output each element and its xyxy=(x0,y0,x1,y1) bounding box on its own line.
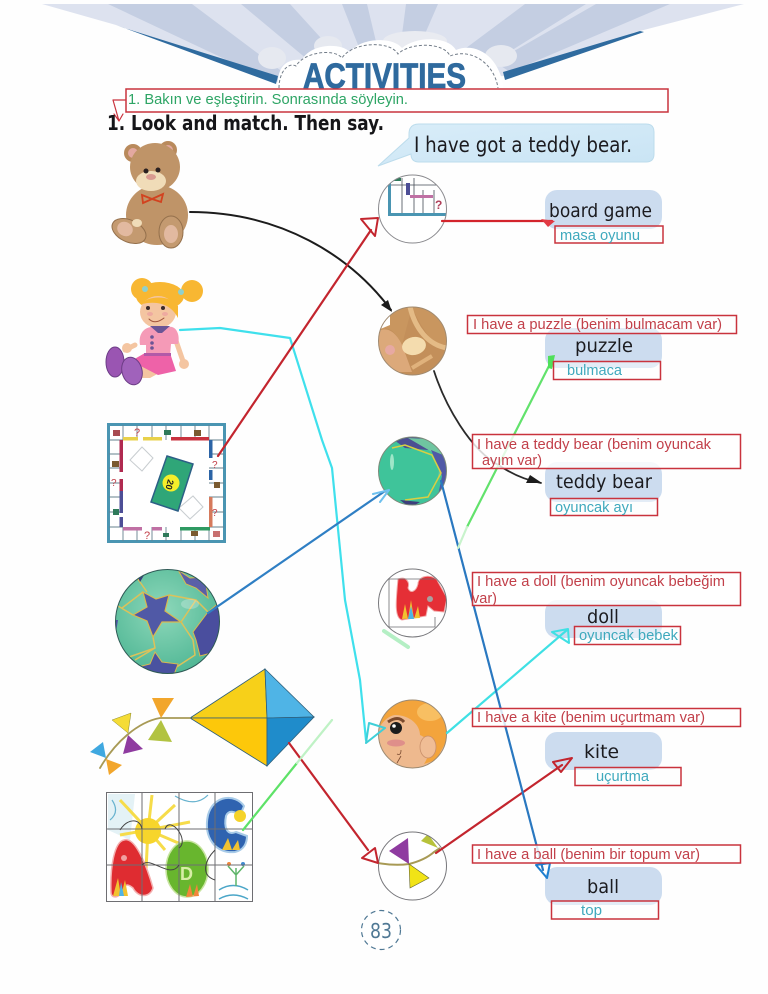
picture: board game: 20 xyxy=(163,478,176,491)
translation callout: instruction xyxy=(113,89,668,121)
translation: top xyxy=(552,901,658,919)
translation: top: top xyxy=(581,902,602,919)
word label: puzzle: puzzle xyxy=(575,335,633,357)
circle: puzzle detail xyxy=(378,568,448,638)
heading: look and match: 1. Look and match. Then say. xyxy=(107,111,384,135)
speech bubble xyxy=(378,124,654,166)
translation: uçurtma xyxy=(575,768,681,786)
arrow: red kite to circle xyxy=(289,743,378,863)
word label: board game xyxy=(545,190,662,229)
word label: ball xyxy=(545,867,662,905)
title: ACTIVITIES: ACTIVITIES xyxy=(303,57,466,96)
picture: board game xyxy=(108,424,224,542)
picture: kite xyxy=(90,669,314,775)
translation: masa oyunu: masa oyunu xyxy=(560,227,640,244)
arrow: red circle to kite label xyxy=(436,758,572,853)
picture: ball xyxy=(115,569,220,674)
word label: teddy bear: teddy bear xyxy=(556,471,652,493)
arrow: green puzzle to circle xyxy=(243,631,408,830)
translation callout: instruction: 1. Bakın ve eşleştirin. Sonrasında söyleyin. xyxy=(128,91,408,108)
circle: doll face detail xyxy=(378,700,447,768)
arrow: black teddy to circle xyxy=(190,212,392,312)
picture: teddy bear xyxy=(108,141,188,249)
arrow: red board game to circle xyxy=(218,218,378,456)
circle: teddy bear detail xyxy=(378,307,448,375)
page number 83: 83 xyxy=(370,919,392,943)
translation: I have a kite: I have a kite (benim uçurtmam var) xyxy=(477,709,705,726)
word label: doll: doll xyxy=(587,606,619,628)
translation: uçurtma: uçurtma xyxy=(596,768,650,785)
arrow: black circle to teddy bear label xyxy=(434,371,542,483)
picture: board game: ? xyxy=(134,427,140,439)
arrow: green circle to puzzle label xyxy=(458,355,555,548)
circle: board game detail xyxy=(378,175,448,245)
translation: oyuncak ayı: oyuncak ayı xyxy=(555,499,633,516)
translation: bulmaca: bulmaca xyxy=(567,362,623,379)
word label: ball: ball xyxy=(587,876,619,898)
word label: teddy bear xyxy=(545,462,662,502)
word label: kite xyxy=(545,732,662,770)
header cloud xyxy=(258,31,517,90)
arrow: blue circle to ball label xyxy=(441,481,550,878)
picture: puzzle xyxy=(106,792,253,902)
arrow: cyan doll to face xyxy=(180,328,385,743)
picture: board game: ? xyxy=(212,460,218,471)
circle: ball detail xyxy=(378,437,450,508)
picture: board game: ? xyxy=(111,478,117,489)
word label: puzzle xyxy=(545,328,662,368)
arrow: blue ball to circle xyxy=(208,490,389,613)
word label: kite: kite xyxy=(584,741,619,763)
picture: puzzle: D xyxy=(180,864,193,884)
translation: I have a doll: var) xyxy=(472,590,497,607)
page number 83 xyxy=(362,910,400,950)
translation: I have a teddy bear xyxy=(472,434,740,469)
word label: doll xyxy=(545,600,662,638)
circle: board game detail: ? xyxy=(435,198,442,212)
picture: board game: ? xyxy=(212,508,218,519)
translation: I have a teddy bear: I have a teddy bear (benim oyuncak xyxy=(477,436,711,453)
translation: I have a doll: I have a doll (benim oyuncak bebeğim xyxy=(477,573,725,590)
translation: I have a ball: I have a ball (benim bir topum var) xyxy=(477,846,700,863)
arrow: cyan face to doll label xyxy=(447,629,569,733)
picture: board game: ? xyxy=(144,530,150,542)
translation: I have a puzzle: I have a puzzle (benim bulmacam var) xyxy=(473,316,722,333)
speech bubble: I have got a teddy bear. xyxy=(414,133,632,157)
translation: bulmaca xyxy=(554,362,660,380)
picture: doll xyxy=(106,278,203,387)
header sunburst banner xyxy=(42,4,744,85)
word label: board game: board game xyxy=(549,200,652,222)
translation: I have a teddy bear: ayım var) xyxy=(482,452,542,469)
translation: I have a doll xyxy=(472,572,740,607)
circle: kite tail detail xyxy=(378,832,448,900)
arrow: red circle to board game label xyxy=(442,219,555,227)
translation: oyuncak bebek: oyuncak bebek xyxy=(579,627,678,644)
